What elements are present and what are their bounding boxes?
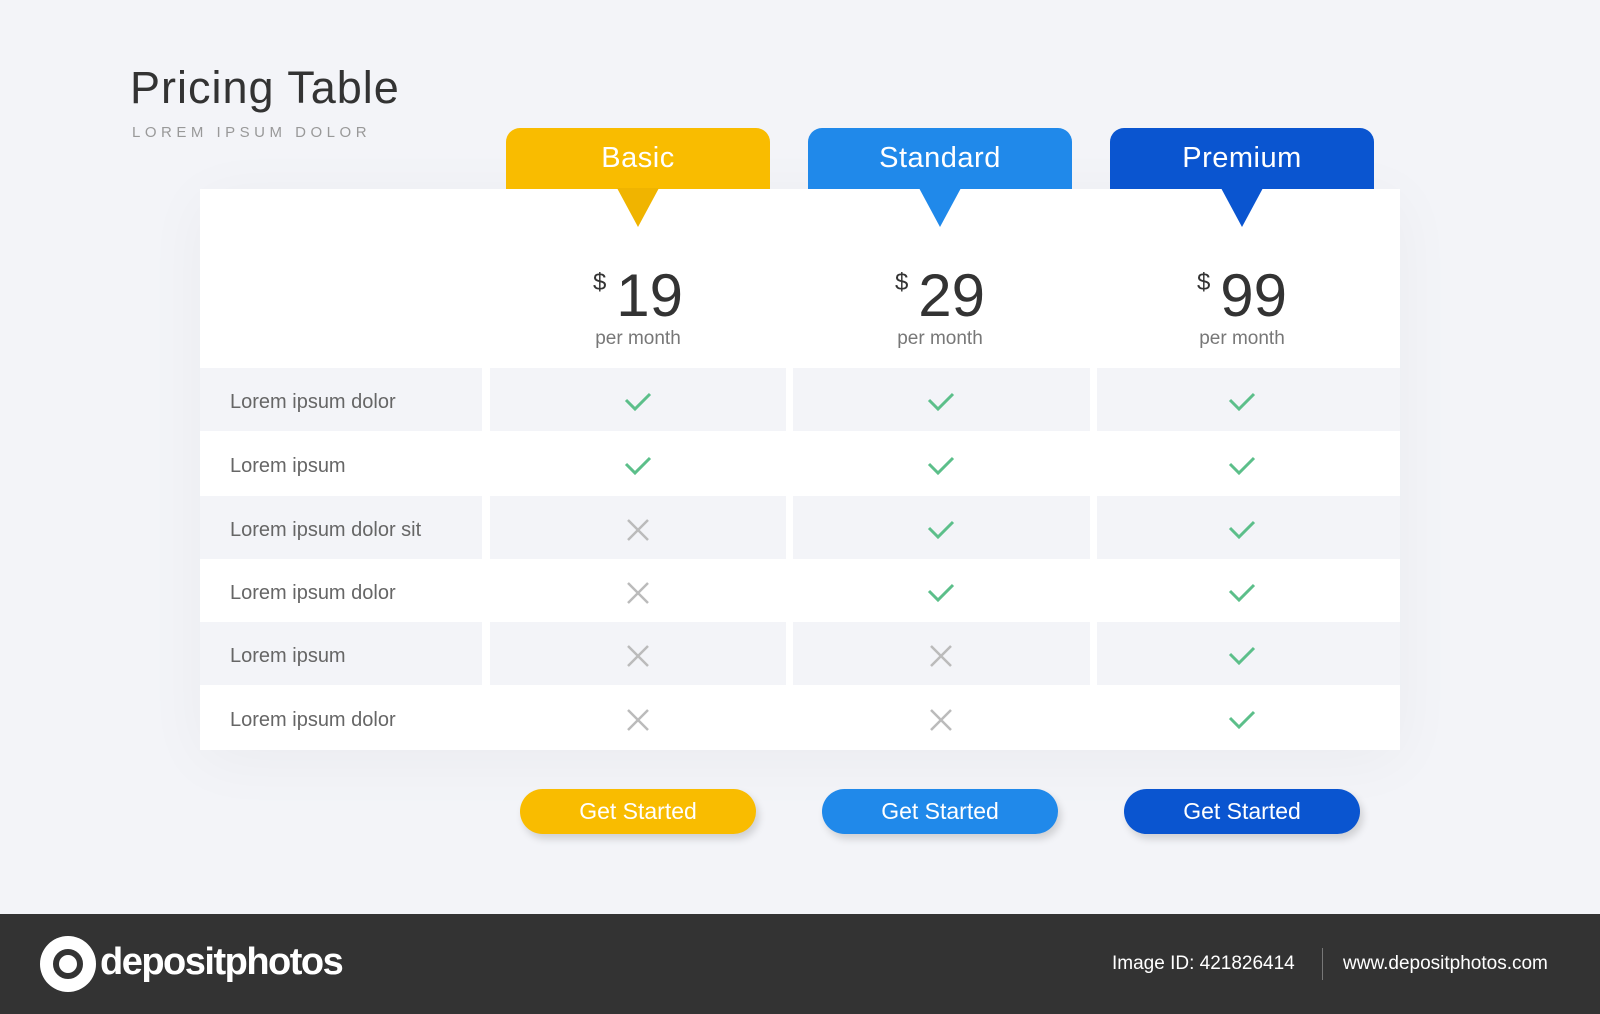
button: Basic bbox=[520, 789, 756, 834]
per month 1: per month bbox=[595, 328, 681, 349]
row 5: Lorem ipsum bbox=[230, 645, 346, 667]
row 5 bbox=[200, 622, 1400, 685]
per month 2: per month bbox=[897, 328, 983, 349]
header: Basic bbox=[506, 128, 770, 189]
button: Standard bbox=[822, 789, 1058, 834]
price: 29: $29 bbox=[895, 262, 985, 329]
price: 19: $19 bbox=[593, 262, 683, 329]
button: Basic: Get Started bbox=[579, 798, 697, 824]
title: Pricing Table bbox=[130, 62, 400, 113]
row 2: Lorem ipsum bbox=[230, 455, 346, 477]
button: Premium bbox=[1124, 789, 1360, 834]
header: Premium: Premium bbox=[1182, 142, 1302, 174]
button: Premium: Get Started bbox=[1183, 798, 1301, 824]
button: Standard: Get Started bbox=[881, 798, 999, 824]
header: Basic: Basic bbox=[601, 142, 675, 174]
row 1 bbox=[200, 368, 1400, 431]
header: Standard bbox=[808, 128, 1072, 189]
pointer: Standard bbox=[919, 188, 961, 227]
image id: Image ID: 421826414 bbox=[1112, 953, 1295, 974]
pointer: Premium bbox=[1221, 188, 1263, 227]
icon: camera bbox=[40, 936, 96, 992]
website: www.depositphotos.com bbox=[1343, 953, 1548, 974]
row 6: Lorem ipsum dolor bbox=[230, 709, 396, 731]
per month 3: per month bbox=[1199, 328, 1285, 349]
row 3: Lorem ipsum dolor sit bbox=[230, 519, 421, 541]
logo: depositphotos bbox=[100, 941, 342, 983]
subtitle: LOREM IPSUM DOLOR bbox=[132, 124, 371, 141]
footer bar bbox=[0, 914, 1600, 1014]
pointer: Basic bbox=[617, 188, 659, 227]
table panel bbox=[200, 189, 1400, 750]
row 6 bbox=[230, 709, 1255, 731]
header: Standard: Standard bbox=[879, 142, 1001, 174]
logo bbox=[40, 936, 342, 992]
row 4: Lorem ipsum dolor bbox=[230, 582, 396, 604]
row 2 bbox=[230, 455, 1255, 477]
price: 99: $99 bbox=[1197, 262, 1287, 329]
row 4 bbox=[230, 582, 1255, 604]
header: Premium bbox=[1110, 128, 1374, 189]
row 1: Lorem ipsum dolor bbox=[230, 391, 396, 413]
row 3 bbox=[200, 496, 1400, 559]
